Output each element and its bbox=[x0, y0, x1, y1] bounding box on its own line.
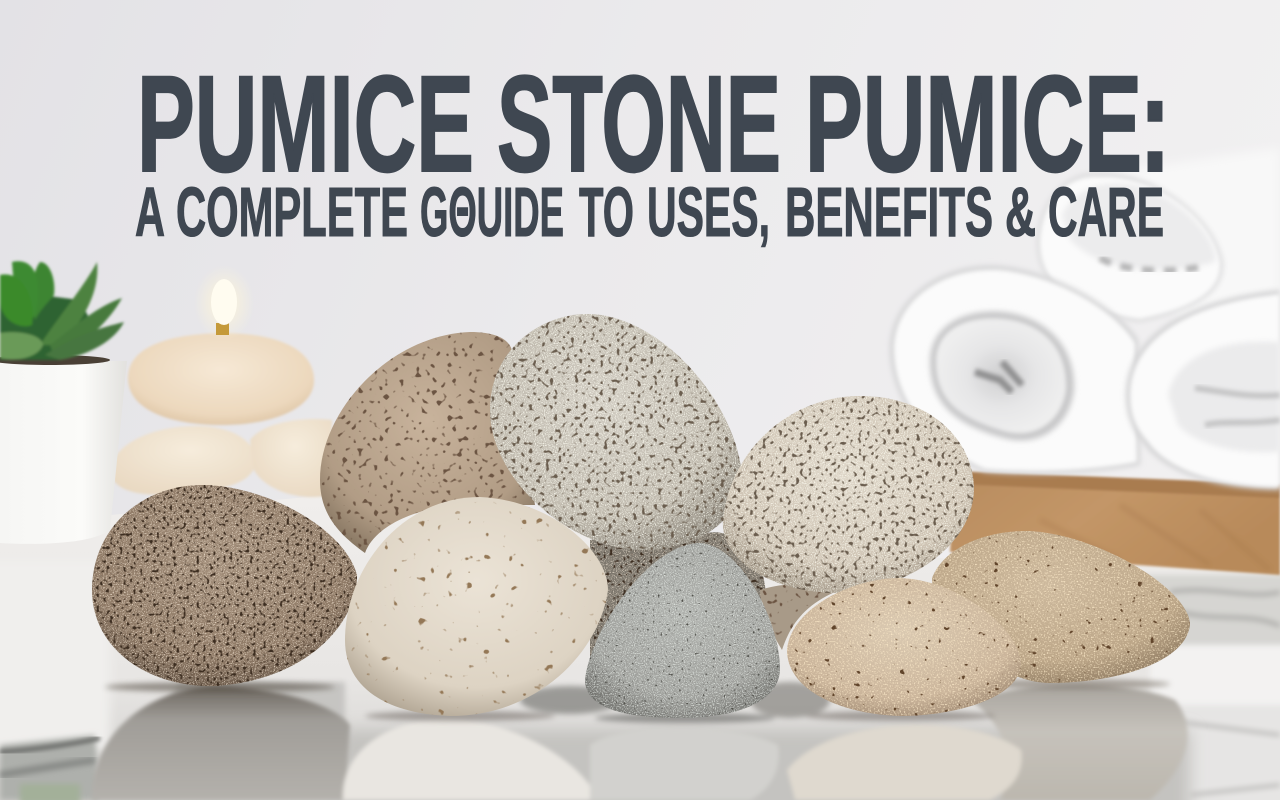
potted succulent bbox=[0, 261, 127, 544]
stone: dark brown left bbox=[92, 485, 357, 686]
reflection: cream stone bbox=[343, 718, 598, 800]
title line one bbox=[137, 48, 1171, 201]
stone reflections bbox=[92, 685, 1187, 800]
soil bbox=[0, 355, 110, 365]
title line one: PUMICE bbox=[137, 48, 474, 201]
wooden tray bbox=[950, 471, 1280, 575]
title line two: BENEFITS bbox=[785, 173, 993, 251]
stone: grey-beige top bbox=[490, 314, 742, 550]
succulent leaves bbox=[0, 261, 124, 360]
upper candle stone bbox=[128, 333, 314, 425]
title bbox=[135, 48, 1171, 251]
title line two: TO bbox=[579, 173, 634, 251]
reflection: brown stone bbox=[92, 686, 350, 800]
towel: left roll bbox=[890, 266, 1140, 474]
title line one: STONE bbox=[497, 48, 781, 201]
pot bbox=[0, 361, 127, 544]
marble: right side veins bbox=[1140, 575, 1280, 800]
reflection: tan stone bbox=[787, 725, 1022, 800]
title line two: & bbox=[1005, 173, 1036, 251]
stone: dark rear middle bbox=[590, 532, 766, 660]
lower right stone bbox=[250, 419, 332, 497]
towel: top roll bbox=[1037, 148, 1280, 322]
stone: cream front bbox=[345, 497, 608, 716]
stone: light speckled right bbox=[723, 396, 974, 593]
reflection: far right stone bbox=[970, 685, 1187, 800]
marble: left side veins bbox=[0, 560, 110, 800]
title line two: GΘUIDE bbox=[420, 173, 564, 251]
towels bbox=[890, 148, 1280, 490]
reflection: grey stone bbox=[590, 727, 779, 800]
stone: tan back left bbox=[320, 332, 535, 553]
title line two: CARE bbox=[1048, 173, 1164, 251]
stone: tan front right bbox=[787, 578, 1021, 716]
title line two bbox=[135, 173, 1164, 251]
stone: grey front bbox=[585, 543, 780, 718]
candle stones bbox=[110, 333, 332, 497]
marble counter bbox=[0, 495, 1280, 800]
towel: right roll bbox=[1126, 290, 1280, 490]
contact shadows bbox=[105, 679, 1170, 723]
stone: rear right bbox=[760, 584, 835, 650]
title line two: COMPLETE bbox=[176, 173, 408, 251]
lower left stone bbox=[110, 426, 256, 495]
pumice stones pile bbox=[92, 314, 1190, 718]
title line two: USES, bbox=[647, 173, 770, 251]
title line one: : bbox=[1139, 48, 1171, 201]
stone: far right tan bbox=[932, 531, 1190, 683]
candle flame bbox=[194, 265, 254, 341]
marble: central grey band bbox=[340, 730, 1190, 800]
title line two: A bbox=[135, 173, 165, 251]
